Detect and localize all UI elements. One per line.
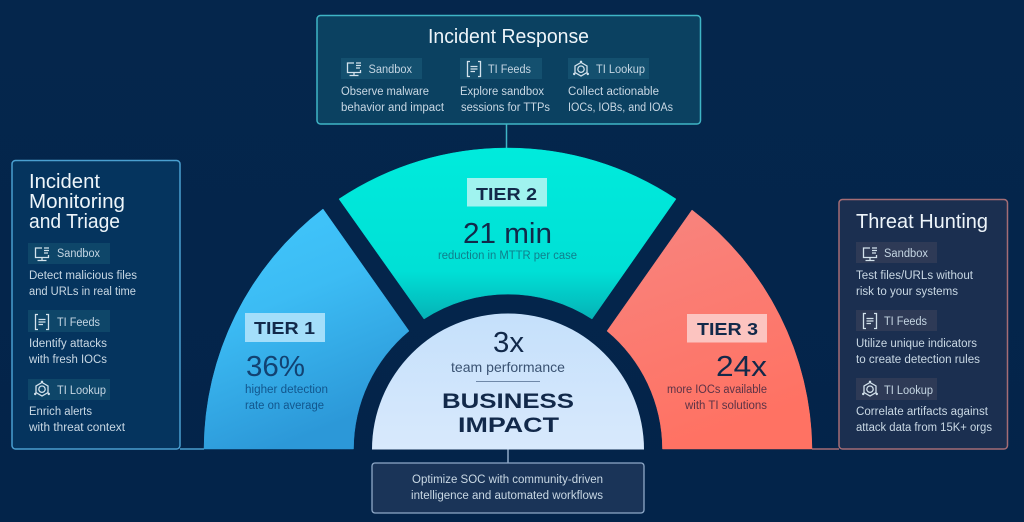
tool: ti feeds: to create detection rules (856, 354, 980, 366)
tool: ti lookup: IOCs, IOBs, and IOAs (568, 102, 673, 114)
tool: sandbox: Test files/URLs without (856, 270, 974, 282)
tool: ti feeds: TI Feeds (884, 316, 927, 328)
panel: bottom summary: intelligence and automated workflows (411, 490, 603, 502)
tier 2 badge: TIER 2 (476, 184, 537, 204)
tool: sandbox: Sandbox (368, 64, 412, 76)
team performance stat: 3x (493, 327, 524, 359)
tool: sandbox: Sandbox (57, 248, 100, 260)
heading: incident monitoring and triage: Monitoring (29, 191, 125, 213)
panel: bottom summary (372, 463, 644, 513)
tier 2 badge (467, 178, 547, 206)
business impact heading: IMPACT (458, 414, 559, 437)
tier 1 stat: 36% (246, 351, 305, 383)
tool: sandbox: risk to your systems (856, 286, 958, 298)
tool: sandbox: Detect malicious files (29, 270, 137, 282)
tool: ti feeds: with fresh IOCs (28, 354, 107, 366)
tier 1 description: rate on average (245, 400, 324, 412)
tool: sandbox: and URLs in real time (29, 286, 136, 298)
business impact heading (442, 390, 574, 437)
tool: sandbox (341, 58, 445, 114)
connector: business impact to bottom panel (507, 449, 509, 463)
tool: sandbox: Sandbox (884, 248, 928, 260)
tool: ti lookup: Correlate artifacts against (856, 406, 989, 418)
tier 3 stat: 24x (716, 351, 768, 383)
heading: incident monitoring and triage (29, 171, 125, 233)
tier 1 description: higher detection (245, 384, 328, 396)
tool: ti feeds (856, 310, 980, 366)
tool: ti lookup: Enrich alerts (29, 406, 92, 418)
connector: left panel to tier 1 (180, 448, 204, 450)
business impact semicircle (372, 314, 644, 450)
tool: ti lookup (568, 58, 673, 114)
tool: ti lookup: with threat context (28, 422, 126, 434)
tool: sandbox (856, 242, 974, 298)
tier 3 badge: TIER 3 (697, 319, 758, 339)
connector: top panel to tier 2 (506, 124, 508, 148)
tier 1 description (245, 384, 328, 412)
tier 3 badge (687, 314, 767, 342)
tool: ti lookup (28, 379, 126, 434)
tier 3 segment (607, 210, 812, 449)
tool: ti feeds: TI Feeds (488, 64, 531, 76)
tier 3 description: with TI solutions (684, 400, 767, 412)
tool: ti feeds: Utilize unique indicators (856, 338, 977, 350)
tier 1 badge: TIER 1 (254, 318, 315, 338)
tier 3 description (667, 384, 767, 412)
business impact heading: BUSINESS (442, 390, 574, 413)
panel: threat hunting (839, 200, 1008, 449)
panel: incident response (317, 16, 700, 124)
tier 2 segment (339, 148, 676, 319)
tool: ti feeds (460, 58, 550, 114)
tier 1 badge (245, 313, 325, 342)
team performance label: team performance (451, 359, 565, 375)
tool: ti feeds: TI Feeds (57, 317, 100, 329)
tool: ti feeds: sessions for TTPs (461, 102, 550, 114)
tool: ti feeds: Identify attacks (29, 338, 107, 350)
tool: ti feeds: Explore sandbox (460, 86, 544, 98)
tool: ti lookup: TI Lookup (57, 385, 106, 397)
tool: ti lookup (856, 378, 992, 434)
heading: threat hunting: Threat Hunting (856, 211, 988, 233)
heading: incident monitoring and triage: and Triage (29, 211, 120, 233)
tier 1 segment (204, 209, 409, 449)
tool: ti lookup: attack data from 15K+ orgs (856, 422, 992, 434)
tool: ti lookup: TI Lookup (884, 385, 933, 397)
tool: ti lookup: Collect actionable (568, 86, 659, 98)
connector: right panel to tier 3 (812, 448, 839, 450)
tool: sandbox: behavior and impact (341, 102, 445, 114)
heading: incident response: Incident Response (428, 26, 589, 48)
tool: ti feeds (28, 310, 110, 366)
heading: incident monitoring and triage: Incident (29, 171, 100, 193)
tier 3 description: more IOCs available (667, 384, 767, 396)
tool: sandbox (28, 243, 137, 298)
tool: sandbox: Observe malware (341, 86, 429, 98)
panel: bottom summary: Optimize SOC with community-driven (412, 474, 603, 486)
panel: incident monitoring and triage (12, 160, 180, 449)
tool: ti lookup: TI Lookup (596, 64, 645, 76)
tier 2 description: reduction in MTTR per case (438, 250, 577, 262)
tier 2 stat: 21 min (463, 218, 552, 250)
